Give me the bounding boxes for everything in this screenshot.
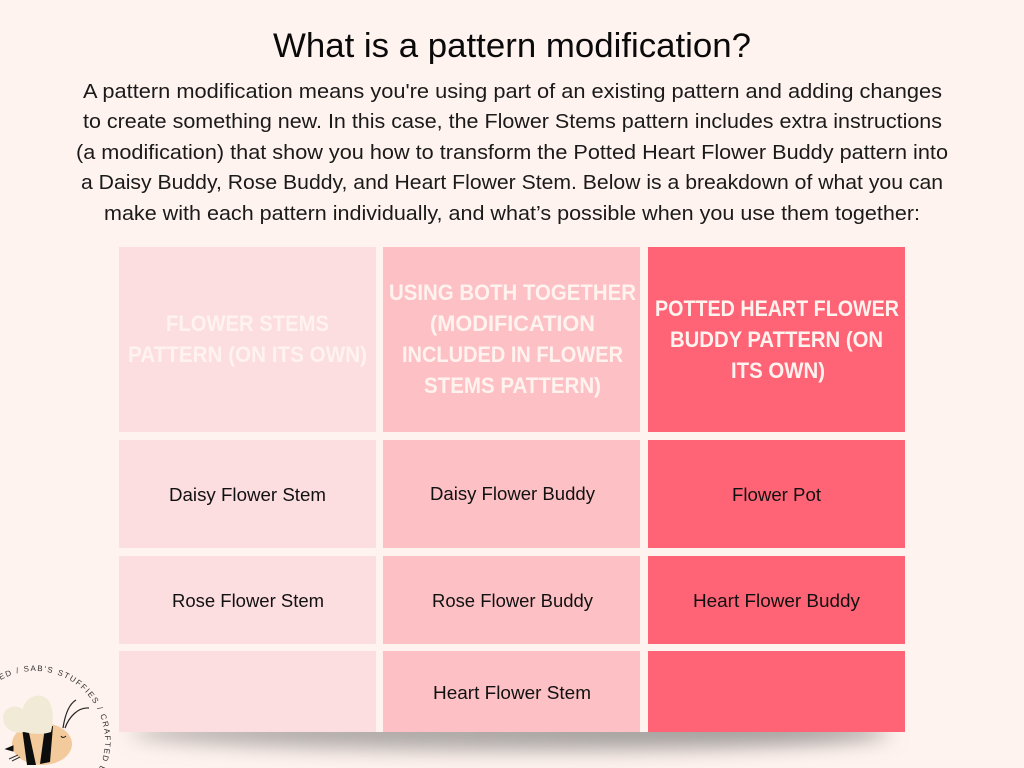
header cell: Using both together: USING BOTH TOGETHER (389, 280, 636, 305)
header cell: Using both together: (MODIFICATION (430, 311, 595, 336)
intro paragraph (76, 80, 948, 225)
header cell: Using both together: STEMS PATTERN) (424, 373, 601, 398)
column: using both together (383, 247, 640, 732)
cell: Flower Pot: Flower Pot (732, 485, 821, 505)
cell: Rose Flower Stem: Rose Flower Stem (172, 591, 324, 611)
header cell: Potted Heart Flower Buddy: POTTED HEART FLOWER (655, 296, 899, 321)
cell: Daisy Flower Stem: Daisy Flower Stem (169, 485, 326, 505)
cell: Flower Pot (648, 440, 905, 548)
cell: Heart Flower Stem (383, 651, 640, 732)
cell: Daisy Flower Buddy: Daisy Flower Buddy (430, 484, 595, 504)
empty cell (119, 651, 376, 732)
header cell: Flower Stems (119, 247, 376, 432)
empty cell (648, 651, 905, 732)
intro paragraph: A pattern modification means you're using part of an existing pattern and adding changes (83, 80, 942, 103)
cell: Rose Flower Buddy (383, 556, 640, 644)
cell: Heart Flower Stem: Heart Flower Stem (433, 683, 591, 703)
cell: Daisy Flower Stem (119, 440, 376, 548)
cell: Rose Flower Stem (119, 556, 376, 644)
icon: bee (3, 696, 89, 765)
cell: Rose Flower Buddy: Rose Flower Buddy (432, 591, 593, 611)
comparison table (119, 247, 905, 732)
logo: bee with circular text (0, 665, 111, 768)
title: What is a pattern modification? (273, 27, 751, 65)
header cell: Flower Stems: PATTERN (ON ITS OWN) (128, 342, 367, 367)
column: Potted Heart Flower Buddy pattern (648, 247, 905, 732)
cell: Heart Flower Buddy: Heart Flower Buddy (693, 591, 860, 611)
header cell: Flower Stems: FLOWER STEMS (166, 311, 329, 336)
header cell: Using both together (383, 247, 640, 432)
header cell: Potted Heart Flower Buddy: ITS OWN) (731, 358, 825, 383)
header cell: Potted Heart Flower Buddy (648, 247, 905, 432)
intro paragraph: to create something new. In this case, the Flower Stems pattern includes extra instructions (83, 110, 942, 133)
intro paragraph: make with each pattern individually, and what’s possible when you use them together: (104, 202, 920, 225)
header cell: Potted Heart Flower Buddy: BUDDY PATTERN (ON (670, 327, 883, 352)
cell: Heart Flower Buddy (648, 556, 905, 644)
header cell: Using both together: INCLUDED IN FLOWER (402, 342, 623, 367)
intro paragraph: a Daisy Buddy, Rose Buddy, and Heart Flower Stem. Below is a breakdown of what you can (81, 171, 943, 194)
intro paragraph: (a modification) that show you how to transform the Potted Heart Flower Buddy pattern into (76, 141, 948, 164)
cell: Daisy Flower Buddy (383, 440, 640, 548)
table drop shadow (129, 732, 894, 762)
column: Flower Stems pattern (119, 247, 376, 732)
